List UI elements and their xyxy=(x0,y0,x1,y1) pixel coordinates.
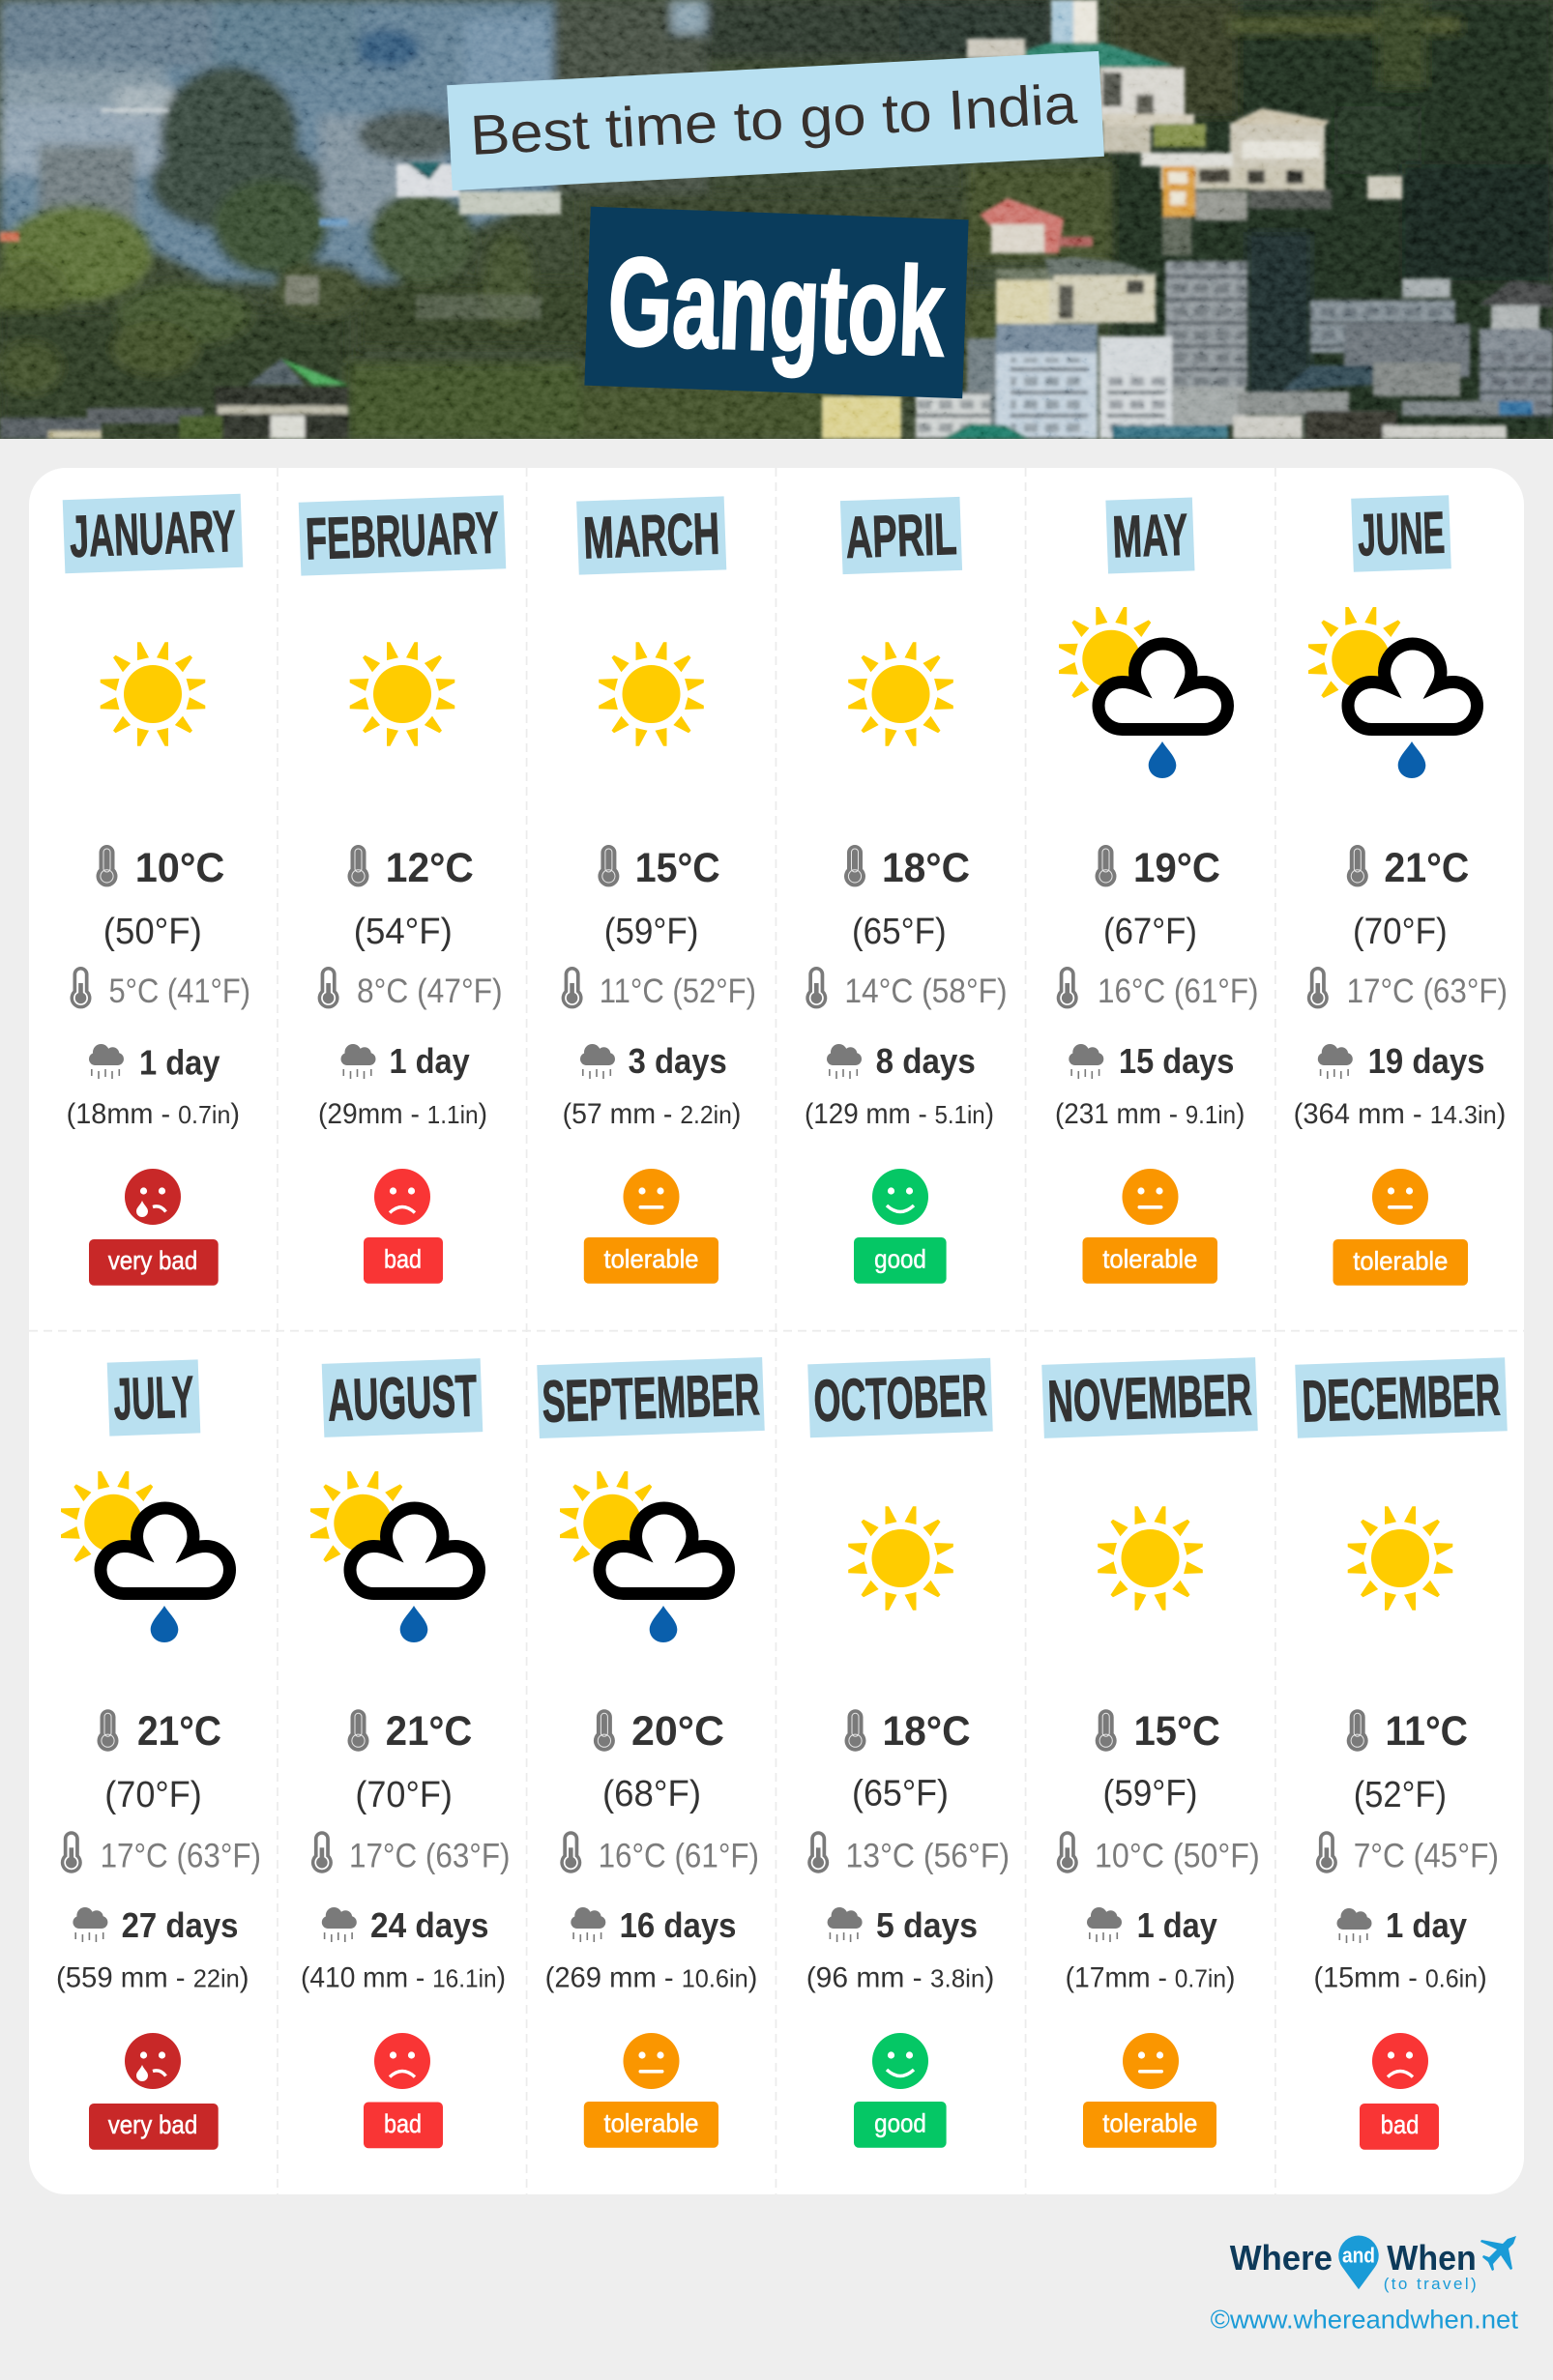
icon: thermometer high xyxy=(1347,845,1368,886)
high temperature fahrenheit: (65°F) xyxy=(852,1774,949,1814)
icon: bad face xyxy=(374,1169,430,1225)
month label xyxy=(1105,497,1194,574)
high temperature: 10°C xyxy=(135,845,224,891)
low temperature: 17°C (63°F) xyxy=(1347,972,1508,1010)
panel: July xyxy=(56,1359,261,2150)
icon: thermometer high xyxy=(845,1709,866,1752)
icon: sun behind rain cloud xyxy=(1308,607,1478,778)
high temperature: 21°C xyxy=(386,1708,472,1755)
logo: Where and When to travel: (to travel) xyxy=(1384,2275,1477,2293)
month label xyxy=(107,1359,200,1437)
logo: Where and When to travel: and xyxy=(1342,2244,1375,2268)
high temperature fahrenheit: (68°F) xyxy=(602,1774,701,1814)
rainfall: (364 mm - 14.3in) xyxy=(1294,1098,1506,1130)
panel: June xyxy=(1294,495,1508,1286)
rainfall: (29mm - 1.1in) xyxy=(318,1098,487,1130)
icon: rain cloud xyxy=(89,1044,124,1079)
rating badge xyxy=(854,2102,947,2148)
low temperature: 11°C (52°F) xyxy=(600,972,756,1010)
icon: thermometer low xyxy=(61,1831,82,1873)
rainy days: 1 day xyxy=(139,1043,220,1083)
icon: sun xyxy=(101,642,205,746)
icon: sun xyxy=(848,1506,953,1611)
rating badge xyxy=(584,2102,718,2148)
month label: AUGUST xyxy=(327,1362,478,1434)
month label: NOVEMBER xyxy=(1046,1361,1253,1435)
panel: October xyxy=(806,1358,1010,2148)
high temperature: 19°C xyxy=(1133,845,1220,891)
rainy days: 5 days xyxy=(876,1905,978,1945)
rainy days: 24 days xyxy=(370,1905,489,1945)
rainfall: (410 mm - 16.1in) xyxy=(301,1962,506,1994)
rating badge xyxy=(364,2102,443,2148)
month label xyxy=(322,1358,483,1437)
rainy days: 19 days xyxy=(1368,1041,1485,1081)
low temperature: 13°C (56°F) xyxy=(845,1838,1010,1875)
rainfall: (18mm - 0.7in) xyxy=(67,1098,240,1130)
logo: Where and When to travel: When xyxy=(1387,2238,1477,2278)
icon: thermometer high xyxy=(598,845,619,886)
icon: tolerable face xyxy=(1123,2033,1179,2089)
high temperature fahrenheit: (70°F) xyxy=(104,1775,202,1815)
rating badge xyxy=(1360,2104,1439,2150)
icon: sun xyxy=(350,642,454,746)
month label: FEBRUARY xyxy=(305,500,500,571)
high temperature: 12°C xyxy=(386,845,474,891)
rainy days: 1 day xyxy=(1386,1905,1467,1945)
icon: sun behind rain cloud xyxy=(560,1471,729,1642)
low temperature: 17°C (63°F) xyxy=(101,1838,261,1875)
icon: very bad face xyxy=(125,2033,181,2089)
icon: very bad face xyxy=(125,1169,181,1225)
icon: thermometer high xyxy=(844,845,865,886)
icon: thermometer high xyxy=(97,1709,118,1752)
high temperature fahrenheit: (50°F) xyxy=(103,912,202,952)
rating badge xyxy=(584,1237,718,1284)
month label: MARCH xyxy=(582,501,720,570)
title banner: Best time to go to India: Best time to go to India xyxy=(469,73,1079,167)
city banner: Gangtok xyxy=(584,207,969,398)
title banner: Best time to go to India xyxy=(447,51,1104,190)
icon: thermometer low xyxy=(807,1831,829,1873)
high temperature fahrenheit: (59°F) xyxy=(604,912,698,952)
low temperature: 5°C (41°F) xyxy=(108,972,250,1010)
icon: thermometer low xyxy=(318,967,339,1008)
icon: sun xyxy=(1348,1506,1452,1611)
month label: JUNE xyxy=(1357,499,1446,568)
high temperature: 18°C xyxy=(882,1708,971,1755)
high temperature: 11°C xyxy=(1385,1708,1468,1755)
rating badge: tolerable xyxy=(1102,2109,1197,2138)
low temperature: 17°C (63°F) xyxy=(349,1838,511,1875)
high temperature: 15°C xyxy=(1134,1708,1220,1755)
icon: thermometer high xyxy=(1095,845,1116,886)
rating badge xyxy=(89,2104,219,2150)
rating badge xyxy=(89,1239,219,1286)
panel: January xyxy=(63,494,250,1286)
rainy days: 3 days xyxy=(629,1041,727,1081)
high temperature fahrenheit: (52°F) xyxy=(1354,1775,1447,1815)
month label xyxy=(840,497,962,574)
low temperature: 7°C (45°F) xyxy=(1354,1838,1499,1875)
month label: SEPTEMBER xyxy=(541,1361,761,1435)
icon: thermometer low xyxy=(1316,1831,1337,1873)
high temperature: 21°C xyxy=(1384,845,1469,891)
high temperature fahrenheit: (54°F) xyxy=(354,912,453,952)
panel: calendar card xyxy=(29,468,1524,2194)
low temperature: 14°C (58°F) xyxy=(844,972,1008,1010)
panel: September xyxy=(537,1357,765,2148)
rating badge: tolerable xyxy=(1102,1245,1197,1274)
rainfall: (96 mm - 3.8in) xyxy=(806,1962,994,1994)
icon: rain cloud xyxy=(580,1044,615,1079)
hero photo: hillside town of Gangtok xyxy=(0,0,1553,439)
icon: thermometer low xyxy=(562,967,583,1008)
icon: bad face xyxy=(1372,2033,1428,2089)
rating badge: very bad xyxy=(108,1246,197,1275)
high temperature: 18°C xyxy=(882,845,970,891)
high temperature fahrenheit: (70°F) xyxy=(1353,912,1448,952)
low temperature: 16°C (61°F) xyxy=(1098,972,1259,1010)
icon: rain cloud xyxy=(322,1907,357,1942)
high temperature: 20°C xyxy=(631,1708,724,1755)
icon: bad face xyxy=(374,2033,430,2089)
low temperature: 8°C (47°F) xyxy=(357,972,503,1010)
rating badge: very bad xyxy=(108,2110,197,2139)
icon: thermometer low xyxy=(806,967,827,1008)
rainfall: (559 mm - 22in) xyxy=(56,1962,249,1994)
low temperature: 16°C (61°F) xyxy=(599,1838,759,1875)
rainy days: 8 days xyxy=(876,1041,976,1081)
icon: thermometer high xyxy=(97,845,118,886)
icon: sun behind rain cloud xyxy=(310,1471,480,1642)
panel: December xyxy=(1295,1357,1508,2150)
rating badge xyxy=(1333,1239,1468,1286)
icon: rain cloud xyxy=(340,1044,375,1079)
rainfall: (15mm - 0.6in) xyxy=(1313,1962,1487,1994)
panel: April xyxy=(805,497,1008,1284)
icon: rain cloud xyxy=(827,1044,862,1079)
icon: sun xyxy=(599,642,704,746)
rating badge: good xyxy=(874,1245,926,1274)
rating badge: tolerable xyxy=(1353,1247,1448,1276)
icon: rain cloud xyxy=(1087,1907,1122,1942)
icon: thermometer high xyxy=(1096,1709,1117,1752)
high temperature fahrenheit: (59°F) xyxy=(1102,1774,1197,1814)
icon: tolerable face xyxy=(1372,1169,1428,1225)
icon: sun behind rain cloud xyxy=(1059,607,1228,778)
rainfall: (231 mm - 9.1in) xyxy=(1055,1098,1245,1130)
high temperature: 21°C xyxy=(137,1708,221,1755)
rating badge xyxy=(1083,2102,1216,2148)
icon: sun behind rain cloud xyxy=(61,1471,230,1642)
high temperature: 15°C xyxy=(635,845,720,891)
rainfall: (17mm - 0.7in) xyxy=(1066,1962,1235,1994)
month label xyxy=(807,1358,993,1437)
panel: March xyxy=(562,496,756,1284)
rainfall: (269 mm - 10.6in) xyxy=(545,1962,757,1994)
icon: thermometer high xyxy=(348,845,369,886)
high temperature fahrenheit: (70°F) xyxy=(355,1775,453,1815)
icon: tolerable face xyxy=(623,2033,679,2089)
month label: APRIL xyxy=(844,501,958,570)
rating badge xyxy=(854,1237,947,1284)
icon: thermometer high xyxy=(594,1709,615,1752)
month label xyxy=(63,494,243,573)
rating badge: good xyxy=(874,2109,926,2138)
rating badge: tolerable xyxy=(603,1245,698,1274)
icon: thermometer low xyxy=(1057,967,1078,1008)
month label xyxy=(537,1357,765,1438)
icon: thermometer low xyxy=(70,967,91,1008)
panel: February xyxy=(299,495,506,1284)
month label: OCTOBER xyxy=(812,1362,988,1434)
icon: rain cloud xyxy=(1336,1908,1371,1943)
rainy days: 15 days xyxy=(1119,1041,1234,1081)
rainy days: 1 day xyxy=(1137,1905,1217,1945)
source url: ©www.whereandwhen.net xyxy=(1211,2305,1518,2334)
city banner: Gangtok: Gangtok xyxy=(605,230,948,383)
panel: August xyxy=(301,1358,511,2148)
icon: rain cloud xyxy=(571,1907,605,1942)
icon: thermometer high xyxy=(1347,1709,1368,1752)
rating badge xyxy=(1083,1237,1217,1284)
month label xyxy=(1041,1357,1258,1438)
rating badge: bad xyxy=(384,2109,422,2138)
month label xyxy=(299,495,506,576)
rainy days: 27 days xyxy=(122,1905,238,1945)
rating badge: bad xyxy=(1381,2110,1419,2139)
icon: thermometer high xyxy=(348,1709,369,1752)
icon: rain cloud xyxy=(1069,1044,1103,1079)
icon: thermometer low xyxy=(1307,967,1329,1008)
rating badge: tolerable xyxy=(603,2109,698,2138)
high temperature fahrenheit: (67°F) xyxy=(1103,912,1197,952)
icon: thermometer low xyxy=(560,1831,581,1873)
logo: Where and When to travel xyxy=(1230,2235,1516,2293)
month label xyxy=(576,496,726,575)
icon: thermometer low xyxy=(1057,1831,1078,1873)
month label xyxy=(1351,495,1451,572)
rainy days: 16 days xyxy=(620,1905,737,1945)
icon: rain cloud xyxy=(73,1907,107,1942)
icon: sun xyxy=(848,642,953,746)
logo: Where and When to travel: Where xyxy=(1230,2238,1333,2278)
icon: plane xyxy=(1480,2236,1516,2271)
icon: rain cloud xyxy=(1318,1044,1353,1079)
icon: good face xyxy=(872,2033,928,2089)
icon: rain cloud xyxy=(828,1907,863,1942)
rating badge: bad xyxy=(384,1245,422,1274)
icon: tolerable face xyxy=(623,1169,679,1225)
icon: tolerable face xyxy=(1122,1169,1178,1225)
rainy days: 1 day xyxy=(389,1041,470,1081)
rainfall: (129 mm - 5.1in) xyxy=(805,1098,994,1130)
low temperature: 10°C (50°F) xyxy=(1095,1838,1260,1875)
month label: JANUARY xyxy=(69,498,237,569)
panel: November xyxy=(1041,1357,1260,2148)
icon: thermometer low xyxy=(311,1831,333,1873)
rainfall: (57 mm - 2.2in) xyxy=(563,1098,741,1130)
icon: map pin xyxy=(1338,2235,1379,2289)
panel: May xyxy=(1055,497,1259,1284)
month label: MAY xyxy=(1111,502,1189,569)
icon: good face xyxy=(872,1169,928,1225)
rating badge xyxy=(364,1237,443,1284)
icon: sun xyxy=(1098,1506,1203,1611)
high temperature fahrenheit: (65°F) xyxy=(852,912,947,952)
month label: JULY xyxy=(112,1364,195,1432)
